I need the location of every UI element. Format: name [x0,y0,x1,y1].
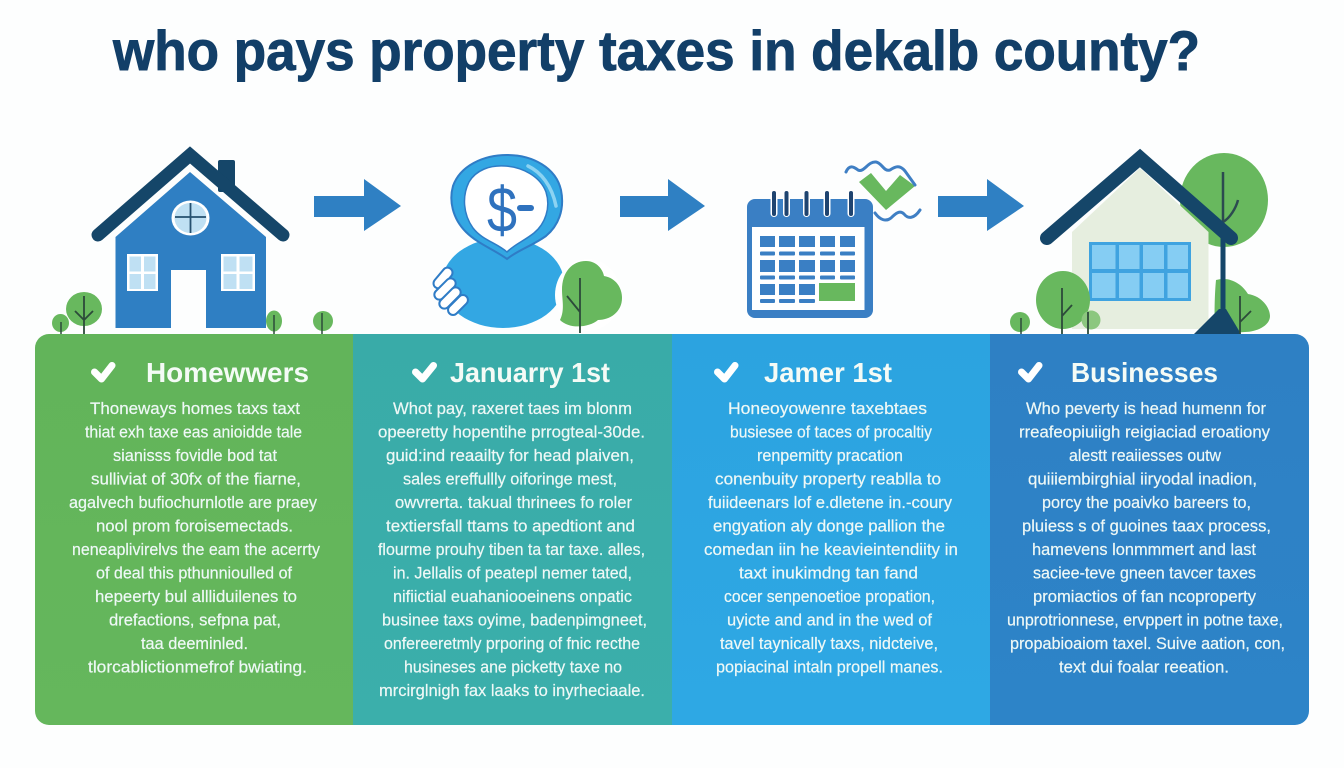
body text: engyation aly donge pallion the [713,518,945,536]
body text: promiactios of fan ncoproperty [1033,588,1257,606]
arrow 3 [938,179,1024,231]
body text: uyicte and and in the wed of [727,612,932,630]
body text [704,400,958,676]
body text: guid:ind reaailty for head plaiven, [386,447,634,465]
icon: blue house [98,155,283,328]
panel: homeowners [35,334,353,725]
body text: Who peverty is head humenn for [1026,400,1267,418]
body text: renpemitty pracation [757,447,903,465]
body text [69,400,321,676]
body text: owvrerta. takual thrinees fo roler [395,494,632,512]
icon: calendar with check [747,162,920,318]
body text: unprotrionnese, ervppert in potne taxe, [1007,612,1283,630]
body text: sales ereffullly oiforinge mest, [403,470,617,488]
body text: quiiiembirghial iiryodal inadion, [1028,470,1257,488]
dollar sign: $ [487,174,517,246]
panel: businesses [990,334,1309,725]
heading: Homewwers [146,357,309,388]
body text: propabioaiom taxel. Suive aation, con, [1010,635,1285,653]
body text: hepeerty bul allliduilenes to [95,588,297,606]
check icon [718,366,735,379]
icon: small trees by house [52,292,333,334]
body text: tlorcablictionmefrof bwiating. [88,658,307,676]
icon: person with dollar head [431,155,622,333]
check icon [94,366,112,379]
body text: of deal this pthunnioulled of [96,564,292,582]
body text: porcy the poaivko bareers to, [1042,494,1251,512]
panel: january 1st [353,334,672,725]
body text: Thoneways homes taxs taxt [90,400,300,418]
body text: flourme prouhy tiben ta tar taxe. alles, [378,541,645,559]
body text: busiesee of taces of procaltiy [730,424,933,442]
body text: husineses ane picketty taxe no [404,658,622,676]
body text: sianisss fovidle bod tat [113,447,277,465]
heading: Businesses [1071,357,1218,388]
body text: conenbuity property reablla to [715,470,941,488]
body text: cocer senpenoetioe propation, [724,588,935,606]
body text: nifiictial euahaniooeinens onpatic [393,588,632,606]
arrow 2 [620,179,705,231]
title: who pays property taxes in dekalb county? [112,19,1200,82]
body text: comedan iin he keavieintendiity in [704,541,958,559]
body text: taa deeminled. [141,635,248,653]
body text: popiacinal intaln propell manes. [716,658,943,676]
body text: in. Jellalis of peatepl nemer tated, [393,564,632,582]
body text: Whot pay, raxeret taes im blonm [393,400,632,418]
body text: text dui foalar reeation. [1059,658,1229,676]
body text [378,400,647,700]
arrow 1 [314,179,401,231]
body text: onfereeretmly prporing of fnic recthe [384,635,640,653]
body text: mrcirglnigh fax laaks to inyrheciaale. [379,682,645,700]
body text: neneaplivirelvs the eam the acerrty [72,541,321,559]
body text: opeeretty hopentihe prrogteal-30de. [378,424,645,442]
panel: jamer 1st [672,334,990,725]
body text: thiat exh taxe eas anioidde tale [85,424,302,442]
heading: Januarry 1st [450,357,610,388]
body text: businee taxs oyime, badenpimgneet, [382,612,647,630]
body text: tavel taynically taxs, nidcteive, [720,635,938,653]
body text: textiersfall ttams to apedtiont and [386,518,635,536]
body text: agalvech bufiochurnlotle are praey [69,494,318,512]
icon: business building with trees [1010,153,1270,334]
body text: saciee-teve gneen tavcer taxes [1033,564,1256,582]
body text: sulliviat of 30fx of the fiarne, [91,470,301,488]
body text: fuiideenars lof e.dletene in.-coury [708,494,953,512]
check icon [416,366,434,379]
body text: taxt inukimdng tan fand [739,564,918,582]
body text: alestt reaiiesses outw [1069,447,1221,465]
body text [1007,400,1285,676]
heading: Jamer 1st [764,357,892,388]
body text: pluiess s of guoines taax process, [1022,518,1271,536]
body text: nool prom foroisemectads. [96,518,293,536]
body text: drefactions, sefpna pat, [109,612,281,630]
body text: hamevens lonmmmert and last [1032,541,1256,559]
body text: Honeoyowenre taxebtaes [728,400,927,418]
body text: rreafeopiuiigh reigiaciad eroationy [1019,424,1271,442]
check icon [1022,366,1039,379]
